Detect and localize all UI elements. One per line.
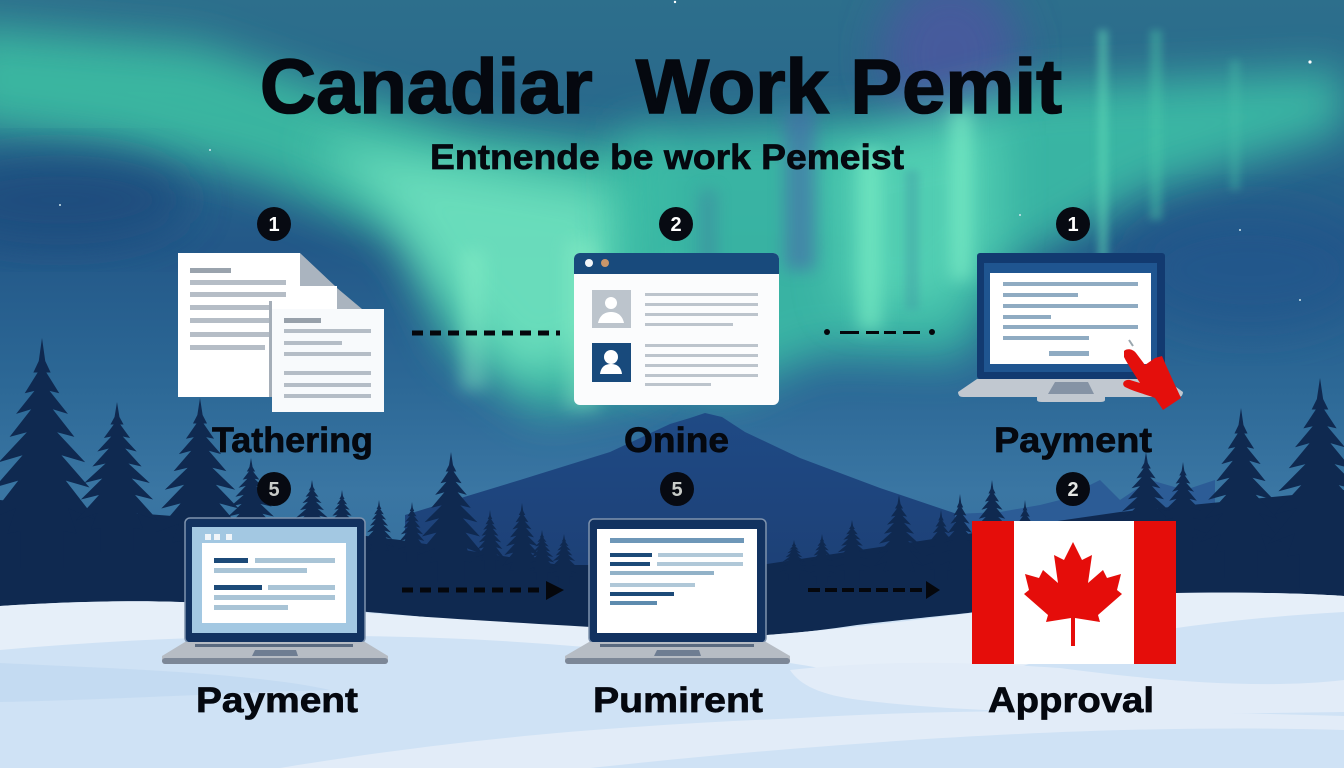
step 3: payment laptop: [958, 207, 1183, 460]
label: Payment: Payment: [994, 421, 1152, 460]
step 2: online form: [574, 207, 779, 460]
title: Canadiar Work Pemit: [260, 44, 1062, 130]
number badge 5: 5: [671, 479, 683, 501]
icon: red pointing hand: [1123, 349, 1181, 410]
subtitle: Entnende be work Pemeist: [430, 138, 904, 177]
icon: laptop with document: [565, 519, 790, 664]
background: mountain: [405, 413, 960, 640]
background: forest silhouette: [0, 338, 1344, 640]
icon: stacked documents: [178, 253, 384, 412]
icon: Canadian flag: [972, 521, 1176, 664]
background: aurora borealis: [0, 0, 1344, 415]
step 4: payment laptop: [162, 472, 388, 720]
number badge 2: [659, 207, 693, 241]
icon: browser window with profiles: [574, 253, 779, 405]
step 1: document gathering: [178, 207, 384, 460]
background: snowy ground: [0, 593, 1344, 768]
number badge 5: 5: [268, 479, 280, 501]
number badge 2: 2: [670, 214, 682, 236]
label: Onine: Onine: [624, 421, 729, 460]
number badge 1: [257, 207, 291, 241]
arrow: step 4 to step 5: [402, 581, 564, 600]
number badge 5: [660, 472, 694, 506]
label: Payment: Payment: [196, 681, 358, 720]
connector: step 2 to step 3: [824, 329, 935, 335]
number badge 1: 1: [268, 214, 280, 236]
label: Pumirent: Pumirent: [593, 681, 763, 720]
step 6: approval flag: [972, 472, 1176, 720]
number badge 1: [1056, 207, 1090, 241]
label: Approval: Approval: [988, 681, 1154, 720]
icon: laptop with application form: [162, 518, 388, 664]
label: Tathering: Tathering: [212, 421, 373, 460]
arrow: step 5 to step 6: [808, 581, 940, 599]
step 5: submission laptop: [565, 472, 790, 720]
arrow: step 1 to step 2: [412, 330, 560, 336]
number badge 5: [257, 472, 291, 506]
background: distant ridge: [955, 480, 1215, 560]
icon: laptop with form and red hand: [958, 253, 1183, 410]
number badge 1: 1: [1067, 214, 1079, 236]
number badge 2: 2: [1067, 479, 1079, 501]
number badge 2: [1056, 472, 1090, 506]
